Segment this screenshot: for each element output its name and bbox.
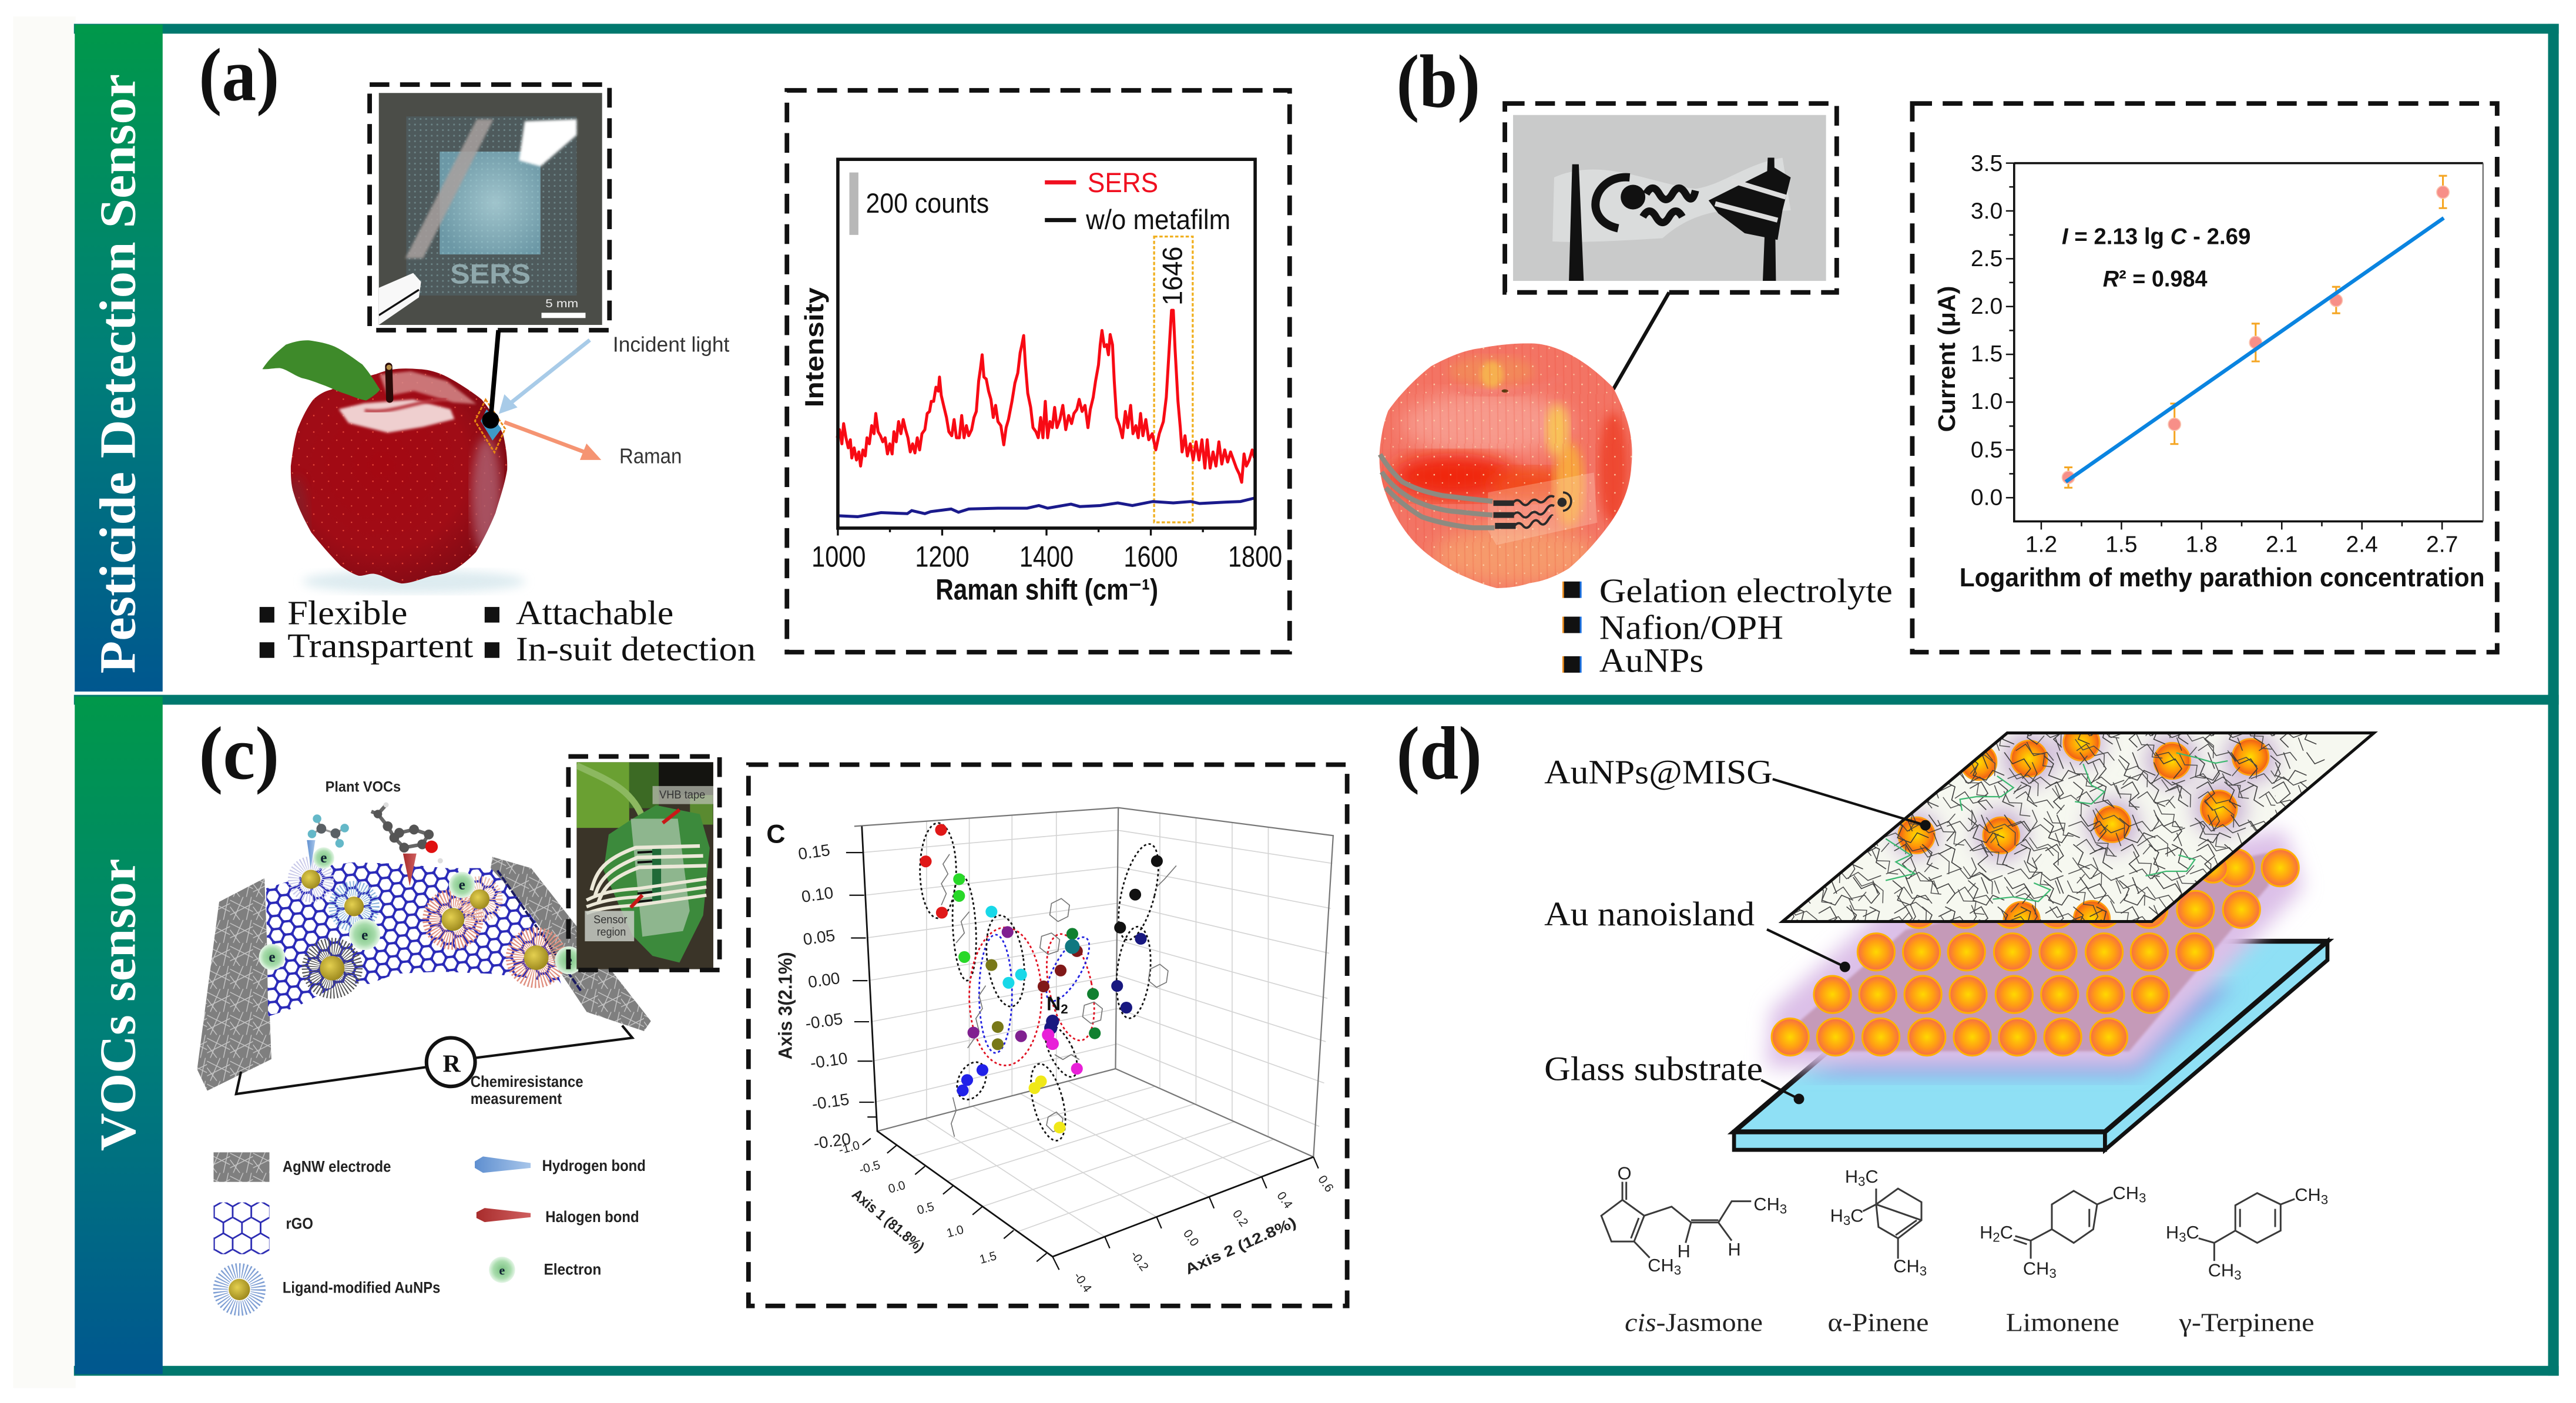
axis 1 labels: -1.0 — [837, 1139, 861, 1157]
axis 2 labels: 0.2 — [1230, 1207, 1250, 1229]
axis 3 labels: -0.15 — [811, 1090, 850, 1113]
photo: sensor on leaf: VHB tape — [659, 788, 705, 801]
legend and scale bar: 200 counts — [866, 188, 989, 219]
molecule: alpha-Pinene: C — [1865, 1166, 1879, 1187]
molecule: gamma-Terpinene — [2166, 1184, 2328, 1337]
axis 1 labels: 0.5 — [915, 1200, 935, 1217]
arrow: incident light — [499, 340, 590, 414]
illustration: VOC molecules and bonds — [307, 803, 443, 886]
fit line — [2066, 218, 2444, 482]
axis 3 labels: 0.10 — [800, 884, 834, 906]
molecule: cis-Jasmone: 3 — [1674, 1263, 1681, 1278]
molecule: cis-Jasmone — [1601, 1163, 1787, 1337]
y axis labels: 1.5 — [1971, 341, 2003, 367]
arrow: Raman — [504, 422, 601, 460]
molecule: alpha-Pinene: H — [1845, 1166, 1858, 1187]
icon: sensor patch — [475, 400, 505, 452]
legend item: hydrogen bond: Hydrogen bond — [542, 1157, 646, 1174]
list item: Nafion/OPH: Nafion/OPH — [1599, 609, 1783, 647]
molecule: alpha-Pinene: α-Pinene — [1827, 1308, 1928, 1337]
legend item: rGO — [213, 1203, 313, 1254]
error bars — [2064, 176, 2447, 488]
illustration: glow under nanoislands — [1766, 830, 2303, 1076]
molecule: cis-Jasmone: O — [1618, 1163, 1632, 1183]
label: Chemiresistance measurement — [471, 1073, 583, 1107]
heading: (d): (d) — [1397, 711, 1482, 795]
photo: SERS film — [379, 93, 602, 325]
label: N2: N — [1046, 993, 1061, 1015]
y axis labels: 2.0 — [1971, 294, 2003, 319]
label: AuNPs@MISG: AuNPs@MISG — [1544, 753, 1773, 791]
circuit: chemiresistance — [236, 1025, 632, 1094]
axis 3 labels: 0.00 — [807, 969, 841, 991]
list: sensor properties — [260, 593, 756, 668]
label: Au nanoisland: Au nanoisland — [1544, 895, 1755, 933]
y axis labels: 2.5 — [1971, 246, 2003, 271]
illustration: glass substrate — [1734, 941, 2327, 1150]
x axis ticks and labels: 1200 — [915, 540, 970, 573]
axis 3 title: Axis 3(2.1%) — [775, 952, 796, 1059]
legend and scale bar: SERS — [1088, 167, 1158, 199]
connector: inset to patch — [482, 330, 499, 428]
legend item: AgNW electrode: AgNW electrode — [283, 1158, 391, 1176]
photo: SERS film: SERS — [450, 259, 531, 290]
heading: (c): (c) — [199, 711, 279, 795]
molecule: alpha-Pinene: 3 — [1920, 1264, 1927, 1278]
icon: apple with sensor — [1378, 343, 1632, 588]
photo: sensor on leaf: region — [597, 926, 626, 939]
molecule: cis-Jasmone: H — [1678, 1241, 1690, 1261]
x axis ticks and labels — [811, 527, 1282, 573]
cluster outlines — [920, 823, 1166, 1144]
molecule: Limonene: 3 — [2049, 1266, 2057, 1281]
dashed frame: leaf inset — [568, 757, 720, 970]
y axis labels: 3.0 — [1971, 199, 2003, 224]
curve: without metafilm — [837, 498, 1255, 516]
molecule: gamma-Terpinene: CH — [2208, 1260, 2234, 1280]
x axis ticks and labels: 1400 — [1019, 540, 1074, 573]
illustration: Au nanoisland array — [1772, 849, 2299, 1056]
molecule: gamma-Terpinene: 3 — [2321, 1192, 2328, 1207]
molecule: gamma-Terpinene: CH — [2295, 1184, 2321, 1205]
y axis labels — [1971, 151, 2003, 511]
dashed frame: Raman chart — [787, 90, 1290, 652]
x axis labels — [2025, 532, 2458, 557]
axis 3 labels: 0.15 — [797, 841, 831, 863]
legend: sensor components — [213, 1152, 646, 1308]
illustration: electrodes and graphene — [197, 857, 651, 1090]
scatter points — [920, 824, 1163, 1133]
list: sensor properties: In-suit detection — [516, 630, 756, 668]
panel: (b) electrochemical sensor on apple — [1372, 39, 2497, 680]
molecule: gamma-Terpinene: γ-Terpinene — [2178, 1308, 2315, 1337]
highlight: 1646 band: 1646 — [1158, 246, 1189, 306]
data points — [2062, 186, 2449, 484]
molecule: Limonene: Limonene — [2006, 1308, 2119, 1337]
axis 3 labels: -0.20 — [813, 1129, 852, 1153]
dashed frame: calibration chart — [1912, 103, 2497, 652]
y axis title: Intensity — [800, 287, 829, 407]
axis 3 labels — [797, 841, 852, 1153]
label: Raman: Raman — [619, 444, 682, 468]
molecule: alpha-Pinene — [1827, 1166, 1928, 1337]
axis 1 title: Axis 1 (81.8%) — [848, 1186, 927, 1256]
molecule: alpha-Pinene: H — [1830, 1205, 1843, 1226]
molecule: alpha-Pinene: CH — [1893, 1256, 1920, 1276]
label: Glass substrate — [1544, 1049, 1804, 1104]
axes — [2006, 163, 2483, 529]
axis 2 labels: 0.6 — [1315, 1173, 1336, 1194]
label: Plant VOCs: Plant VOCs — [326, 779, 401, 796]
legend item: ligand-modified AuNPs: Ligand-modified AuNPs — [283, 1278, 440, 1296]
label: Incident light: Incident light — [613, 332, 729, 356]
legend item: halogen bond: Halogen bond — [545, 1208, 639, 1226]
plot walls and grid — [862, 812, 1332, 1237]
axis 1 labels — [837, 1139, 998, 1267]
dashed frame: 3D plot — [749, 765, 1347, 1306]
molecule: cis-Jasmone: CH — [1648, 1255, 1674, 1276]
legend item: rGO: rGO — [286, 1214, 313, 1232]
legend item: ligand-modified AuNPs — [220, 1271, 440, 1308]
molecule: cis-Jasmone: H — [1728, 1239, 1741, 1260]
section strip: Pesticide Detection Sensor — [75, 25, 163, 692]
section strip: Pesticide Detection Sensor: Pesticide Detection Sensor — [89, 74, 146, 673]
legend and scale bar — [849, 167, 1230, 236]
molecule: Limonene: H — [1980, 1222, 1993, 1243]
list item: Gelation electrolyte: Gelation electrolyte — [1599, 572, 1893, 610]
equation: I = 2.13 lg C - 2.69 — [2062, 224, 2250, 249]
y axis labels: 0.0 — [1971, 485, 2003, 511]
curve: SERS — [837, 310, 1255, 482]
axis 2 labels — [1071, 1173, 1336, 1295]
illustration: MISG sheet — [1778, 731, 2378, 923]
x axis labels: 1.5 — [2105, 532, 2138, 557]
molecule: gamma-Terpinene: C — [2186, 1222, 2199, 1243]
molecule: cis-Jasmone: CH — [1753, 1194, 1780, 1214]
x axis labels: 2.4 — [2346, 532, 2378, 557]
x axis labels: 1.2 — [2025, 532, 2057, 557]
highlight: 1646 band — [1154, 237, 1193, 522]
axis 3 labels: -0.05 — [804, 1009, 844, 1033]
legend item: hydrogen bond — [475, 1156, 646, 1174]
x axis ticks and labels: 1800 — [1228, 540, 1282, 573]
molecule: cis-Jasmone: cis-Jasmone — [1625, 1308, 1763, 1337]
axis 3 labels: 0.05 — [802, 926, 836, 949]
section strip: VOCs sensor: VOCs sensor — [89, 858, 146, 1151]
label: N2: 2 — [1061, 1002, 1068, 1016]
dashed frame: film inset — [370, 85, 609, 330]
molecule: alpha-Pinene: C — [1850, 1205, 1864, 1226]
label: AuNPs@MISG — [1544, 753, 1931, 831]
plot axes — [846, 808, 1333, 1270]
panel: (d) AuNPs@MISG sensor stack — [1397, 711, 2374, 1337]
list: sensor properties: Attachable — [516, 593, 673, 632]
molecule sketches — [941, 854, 1176, 1137]
molecule: Limonene: 2 — [1993, 1230, 2000, 1245]
label: Glass substrate: Glass substrate — [1544, 1049, 1763, 1088]
heading: (b): (b) — [1397, 39, 1480, 123]
label: Chemiresistance measurement: Chemiresistance — [471, 1073, 583, 1090]
R squared: R² = 0.984 — [2103, 266, 2208, 291]
axis 2 labels: -0.2 — [1128, 1248, 1151, 1274]
list: sensor properties: Flexible — [287, 593, 407, 632]
axis 3 labels: -0.10 — [809, 1049, 848, 1072]
list: sensor layers — [1562, 572, 1893, 680]
chart: 3D PCA scatter — [766, 808, 1336, 1295]
axis 1 labels: 1.5 — [978, 1249, 998, 1267]
molecule: gamma-Terpinene: 3 — [2179, 1230, 2186, 1245]
chart: current vs concentration — [1933, 151, 2485, 592]
heading: (a): (a) — [199, 33, 279, 117]
axis 2 labels: -0.4 — [1071, 1270, 1094, 1295]
molecule: gamma-Terpinene: H — [2166, 1222, 2179, 1243]
axis 2 labels: 0.0 — [1180, 1227, 1202, 1249]
axis 1 labels: 0.0 — [887, 1179, 907, 1196]
y axis title: Current (μA) — [1933, 286, 1960, 432]
legend item: AgNW electrode — [213, 1152, 391, 1182]
label: Au nanoisland — [1544, 895, 1850, 972]
list item: AuNPs: AuNPs — [1599, 642, 1703, 680]
photo: sensor on leaf — [576, 762, 713, 969]
illustration: electrons: e — [320, 850, 327, 866]
axis 1 labels: -0.5 — [858, 1158, 882, 1177]
molecule: alpha-Pinene: 3 — [1843, 1213, 1850, 1228]
molecule: Limonene: C — [2000, 1222, 2013, 1243]
circuit: chemiresistance: R — [443, 1050, 461, 1078]
photo: bent electrode — [1513, 115, 1826, 281]
molecule: Limonene: 3 — [2139, 1191, 2146, 1206]
y axis labels: 0.5 — [1971, 438, 2003, 463]
x axis labels: 1.8 — [2186, 532, 2218, 557]
illustration: electrons: e — [459, 877, 465, 893]
panel letter C: C — [766, 820, 786, 848]
legend item: electron: Electron — [544, 1261, 601, 1278]
illustration: electrons: e — [361, 927, 368, 943]
chart: Raman spectrum — [800, 159, 1282, 606]
y axis labels: 3.5 — [1971, 151, 2003, 176]
legend item: halogen bond — [477, 1208, 639, 1226]
label: Chemiresistance measurement: measurement — [471, 1090, 562, 1107]
illustration: electrons: e — [566, 953, 572, 969]
y axis labels: 1.0 — [1971, 389, 2003, 414]
illustration: ligand AuNPs — [294, 863, 558, 989]
molecule: gamma-Terpinene: 3 — [2234, 1268, 2242, 1283]
x axis ticks and labels: 1600 — [1123, 540, 1178, 573]
molecule: Limonene — [1980, 1183, 2146, 1337]
panel: (c) VOC chemiresistive sensor — [197, 711, 1347, 1308]
legend item: electron — [489, 1257, 601, 1283]
connector: inset to apple — [1614, 293, 1669, 390]
illustration: electrons — [259, 847, 583, 974]
list: sensor properties: Transpartent — [287, 626, 473, 664]
section strip: VOCs sensor — [75, 696, 163, 1374]
x axis labels: 2.1 — [2266, 532, 2297, 557]
axis 1 labels: 1.0 — [945, 1223, 965, 1240]
icon: apple with leaf — [263, 340, 526, 593]
x axis ticks and labels: 1000 — [811, 540, 866, 573]
panel: (a) SERS metafilm on apple — [199, 33, 1290, 668]
x axis title: Logarithm of methy parathion concentration — [1960, 563, 2485, 592]
molecule: cis-Jasmone: 3 — [1780, 1202, 1787, 1217]
photo: sensor on leaf: Sensor — [593, 913, 628, 926]
legend and scale bar: w/o metafilm — [1085, 204, 1230, 236]
molecule: alpha-Pinene: 3 — [1858, 1174, 1865, 1189]
photo: SERS film: 5 mm — [545, 297, 578, 310]
x axis title: Raman shift (cm⁻¹) — [935, 573, 1158, 606]
x axis labels: 2.7 — [2426, 532, 2458, 557]
molecule: Limonene: CH — [2023, 1258, 2049, 1279]
molecule: Limonene: CH — [2113, 1183, 2139, 1203]
dashed frame: device inset — [1505, 103, 1837, 293]
axes frame — [838, 159, 1255, 528]
axis 2 title: Axis 2 (12.8%) — [1183, 1214, 1299, 1278]
axis 2 labels: 0.4 — [1274, 1189, 1295, 1211]
illustration: electrons: e — [269, 949, 276, 965]
legend item: electron: e — [499, 1263, 505, 1278]
